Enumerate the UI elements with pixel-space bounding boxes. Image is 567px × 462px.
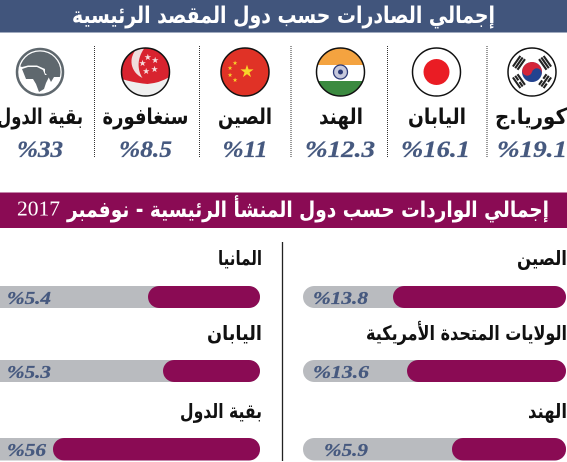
import item: Germany [0, 246, 262, 308]
icon: Japan flag [412, 48, 460, 96]
percentage: %5.4 [7, 288, 51, 308]
export column: China [218, 48, 272, 162]
bar track [303, 286, 566, 308]
import item: India [303, 399, 567, 460]
icon: India flag [316, 48, 364, 96]
icon: Singapore flag: ★ [144, 53, 152, 63]
exports header banner [0, 0, 567, 32]
icon: Singapore flag: ★ [142, 67, 150, 77]
icon: China flag: ★ [232, 77, 238, 84]
bar track [303, 360, 566, 382]
import item: Japan [0, 321, 262, 382]
percentage: %5.3 [7, 362, 51, 382]
icon: Singapore flag: ★ [151, 56, 159, 66]
percentage: %16.1 [401, 137, 470, 162]
name: اليابان [207, 321, 262, 345]
percentage: %5.9 [324, 440, 368, 460]
export column: Japan [401, 48, 470, 162]
name: المانيا [218, 246, 262, 270]
name: سنغافورة [102, 105, 188, 130]
bar fill [452, 438, 566, 460]
bar fill [163, 360, 260, 382]
bar fill [393, 286, 566, 308]
percentage: %13.8 [313, 288, 368, 308]
name: الهند [319, 105, 363, 130]
name: بقية الدول [0, 105, 83, 130]
export column: Singapore [102, 48, 188, 162]
bar track [0, 286, 260, 308]
import item: rest of the countries [0, 399, 262, 460]
imports central divider [282, 242, 284, 461]
exports column dividers [94, 46, 487, 158]
percentage: %11 [222, 137, 268, 162]
percentage: %13.6 [313, 362, 369, 382]
icon: Singapore flag: ★ [139, 59, 147, 69]
icon: South Korea flag [508, 48, 556, 96]
bar fill [148, 286, 260, 308]
bar track [0, 360, 260, 382]
icon: China flag [221, 48, 269, 96]
percentage: %8.5 [119, 137, 172, 162]
percentage: %33 [17, 137, 63, 162]
import item: China [303, 246, 567, 308]
imports header banner [0, 192, 567, 228]
name: الصين [218, 105, 272, 130]
import item: United States [303, 320, 567, 382]
export column: rest of the countries [0, 49, 83, 162]
bar track [303, 438, 566, 460]
icon: globe [17, 49, 63, 95]
name: بقية الدول [180, 399, 262, 423]
icon: Singapore flag [122, 48, 170, 96]
icon: Singapore flag: ★ [151, 65, 159, 75]
percentage: %56 [7, 440, 46, 460]
icon: China flag: ★ [232, 60, 238, 67]
icon: China flag: ★ [239, 62, 255, 82]
bar track [0, 438, 260, 460]
export column: South Korea [495, 48, 567, 162]
percentage: %19.1 [497, 137, 567, 162]
icon: China flag: ★ [227, 72, 233, 79]
export column: India [305, 48, 375, 162]
percentage: %12.3 [305, 137, 375, 162]
bar fill [53, 438, 260, 460]
icon: China flag: ★ [227, 65, 233, 72]
imports header banner: 2017 [17, 196, 60, 220]
bar fill [407, 360, 566, 382]
name: اليابان [408, 105, 466, 130]
